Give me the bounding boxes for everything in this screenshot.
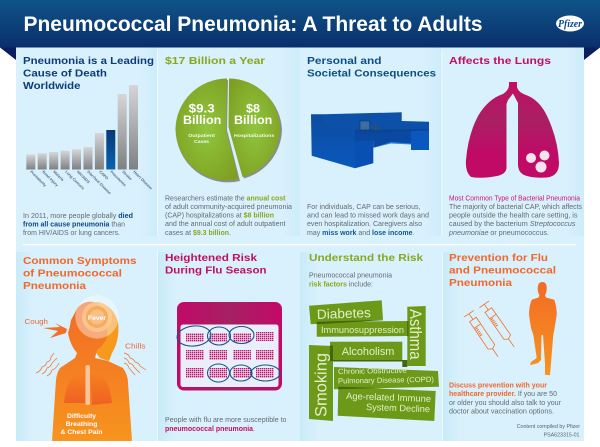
risk factor tags xyxy=(309,300,439,421)
panel: 17 billion a year xyxy=(165,56,292,237)
credit: Content compiled by Pfizer xyxy=(517,424,580,430)
body text: from HIV/AIDS or lung cancers. xyxy=(23,230,120,237)
bar chart: Stroke xyxy=(121,170,132,181)
heading: and Pneumococcal xyxy=(449,266,556,276)
bar chart: Road Injury xyxy=(41,170,60,188)
body text: Researchers estimate the annual cost xyxy=(165,196,286,202)
icon: syringes xyxy=(464,301,519,360)
bar chart: Pneumonia xyxy=(109,170,127,188)
symptom text: breathing: Difficulty xyxy=(67,413,96,420)
heading: Pneumonia xyxy=(23,281,86,292)
pie chart: Billion xyxy=(234,115,272,127)
body text xyxy=(448,196,582,237)
risk factor tags: Asthma xyxy=(406,309,425,360)
icon: chills lines xyxy=(36,353,146,376)
icon: lungs xyxy=(466,82,559,178)
panel: affects the lungs xyxy=(448,56,582,237)
header banner xyxy=(0,0,600,60)
heading: During Flu Season xyxy=(165,266,266,276)
symptom text: breathing: & Chest Pain xyxy=(61,429,102,436)
pie chart: $9.3 xyxy=(189,104,215,116)
body text: of adult community-acquired pneumonia xyxy=(165,204,292,211)
heading: $17 Billion a Year xyxy=(165,56,265,67)
body text: doctor about vaccination options. xyxy=(449,408,554,416)
bar chart: Diarrheal Disease xyxy=(86,170,112,195)
panel: prevention xyxy=(449,253,580,438)
icon: Pfizer logo: Pfizer xyxy=(558,19,582,30)
overlaps xyxy=(317,320,408,389)
pie chart: Hospitalizations xyxy=(234,133,275,138)
intro text: Pneumococcal pneumonia xyxy=(309,272,392,280)
intro text xyxy=(309,272,392,288)
pie chart: Billion xyxy=(183,115,221,127)
heading: Heightened Risk xyxy=(165,253,257,264)
body text: Most Common Type of Bacterial Pneumonia xyxy=(449,196,580,202)
heading: Understand the Risk xyxy=(309,253,423,264)
heading xyxy=(23,256,137,292)
risk factor tags: Chronic Obstructive xyxy=(338,366,407,376)
panel: personal and societal consequences xyxy=(307,56,436,237)
heading: Pneumonia is a Leading xyxy=(23,56,154,67)
panel: heightened risk xyxy=(165,253,287,433)
bar chart: HIV/AIDS xyxy=(76,170,91,185)
body text xyxy=(23,213,133,237)
heading: Affects the Lungs xyxy=(449,56,551,67)
body text: pneumoniae or pneumococcus. xyxy=(448,230,549,237)
body text: may miss work and lose income. xyxy=(307,230,415,237)
heading xyxy=(23,56,154,92)
panel: common symptoms xyxy=(23,256,146,441)
body text: cases at $9.3 billion. xyxy=(165,230,231,237)
heading xyxy=(449,253,556,289)
credit: PSA623315-01 xyxy=(544,432,580,438)
risk factor tags: Diabetes xyxy=(317,305,371,322)
icon: cough burst xyxy=(43,323,67,338)
risk factor tags: System Decline xyxy=(366,402,430,414)
bar chart: Prematurity xyxy=(29,170,48,188)
fever glow xyxy=(75,295,119,339)
body text: and can lead to missed work days and xyxy=(307,212,429,220)
label: cough: Cough xyxy=(24,317,48,326)
body text: healthcare provider. If you are 50 xyxy=(449,391,557,398)
body text: For individuals, CAP can be serious, xyxy=(307,204,421,211)
bar chart: Heart Disease xyxy=(132,170,153,190)
heading: Personal and xyxy=(307,56,382,67)
bar chart: COPD xyxy=(98,170,109,181)
heading xyxy=(307,56,436,80)
risk factor tags: Smoking xyxy=(312,353,330,417)
heading xyxy=(165,253,266,276)
body text: from all cause pneumonia than xyxy=(23,222,125,228)
figure: human silhouette xyxy=(52,295,132,441)
figure: human silhouette: Fever xyxy=(88,315,106,322)
symptom text: breathing xyxy=(61,413,102,436)
heading: Pneumonia xyxy=(449,278,512,289)
bar chart xyxy=(26,85,153,195)
intro text: risk factors include: xyxy=(309,282,373,288)
icon: Pfizer logo xyxy=(556,16,584,32)
icon: person silhouette xyxy=(529,282,557,375)
title: Pneumococcal Pneumonia: A Threat to Adults xyxy=(24,13,482,36)
heading: Prevention for Flu xyxy=(449,253,548,264)
heading: Societal Consequences xyxy=(307,68,436,80)
body text: The majority of bacterial CAP, which affects xyxy=(449,204,582,211)
body text: and the annual cost of adult outpatient xyxy=(165,221,286,228)
body text: Discuss prevention with your xyxy=(449,382,547,390)
body text: or older you should also talk to your xyxy=(449,400,562,407)
panel: understand the risk xyxy=(309,253,439,421)
pie chart xyxy=(176,78,282,182)
body text: pneumococcal pneumonia. xyxy=(165,426,255,433)
risk factor tags: Immunosuppression xyxy=(321,325,404,335)
body text: In 2011, more people globally died xyxy=(23,213,133,220)
body text xyxy=(165,196,292,237)
risk factor tags: Pulmonary Disease (COPD) xyxy=(338,375,435,385)
body text xyxy=(307,204,429,237)
pie chart: $8 xyxy=(246,104,261,116)
icon: calendar xyxy=(176,302,282,390)
heading: Cause of Death xyxy=(23,68,107,80)
symptom text: breathing: Breathing xyxy=(66,421,97,428)
risk factor tags: Age-related Immune xyxy=(346,391,431,404)
label: chills: Chills xyxy=(125,342,146,350)
body text: (CAP) hospitalizations at $8 billion xyxy=(165,212,274,220)
panel: leading cause of death xyxy=(23,56,154,237)
heading: Worldwide xyxy=(23,81,81,92)
bar chart: Malaria xyxy=(52,170,65,183)
body text: even hospitalization. Caregivers also xyxy=(307,221,422,228)
pie chart: Outpatient xyxy=(188,133,215,138)
body text: caused by the bacterium Streptococcus xyxy=(449,221,576,228)
pie chart: Cases xyxy=(194,139,209,144)
body text: People with flu are more susceptible to xyxy=(165,417,287,424)
risk factor tags: Alcoholism xyxy=(342,346,394,358)
heading: Common Symptoms xyxy=(23,256,137,267)
body text: people outside the health care setting, is xyxy=(449,212,578,220)
bar chart: Lung Cancers xyxy=(64,170,85,191)
body text xyxy=(449,382,562,416)
credit xyxy=(517,424,580,438)
icon: empty office cubicle desk xyxy=(311,112,429,168)
body text xyxy=(165,417,287,433)
heading: of Pneumococcal xyxy=(23,268,122,280)
